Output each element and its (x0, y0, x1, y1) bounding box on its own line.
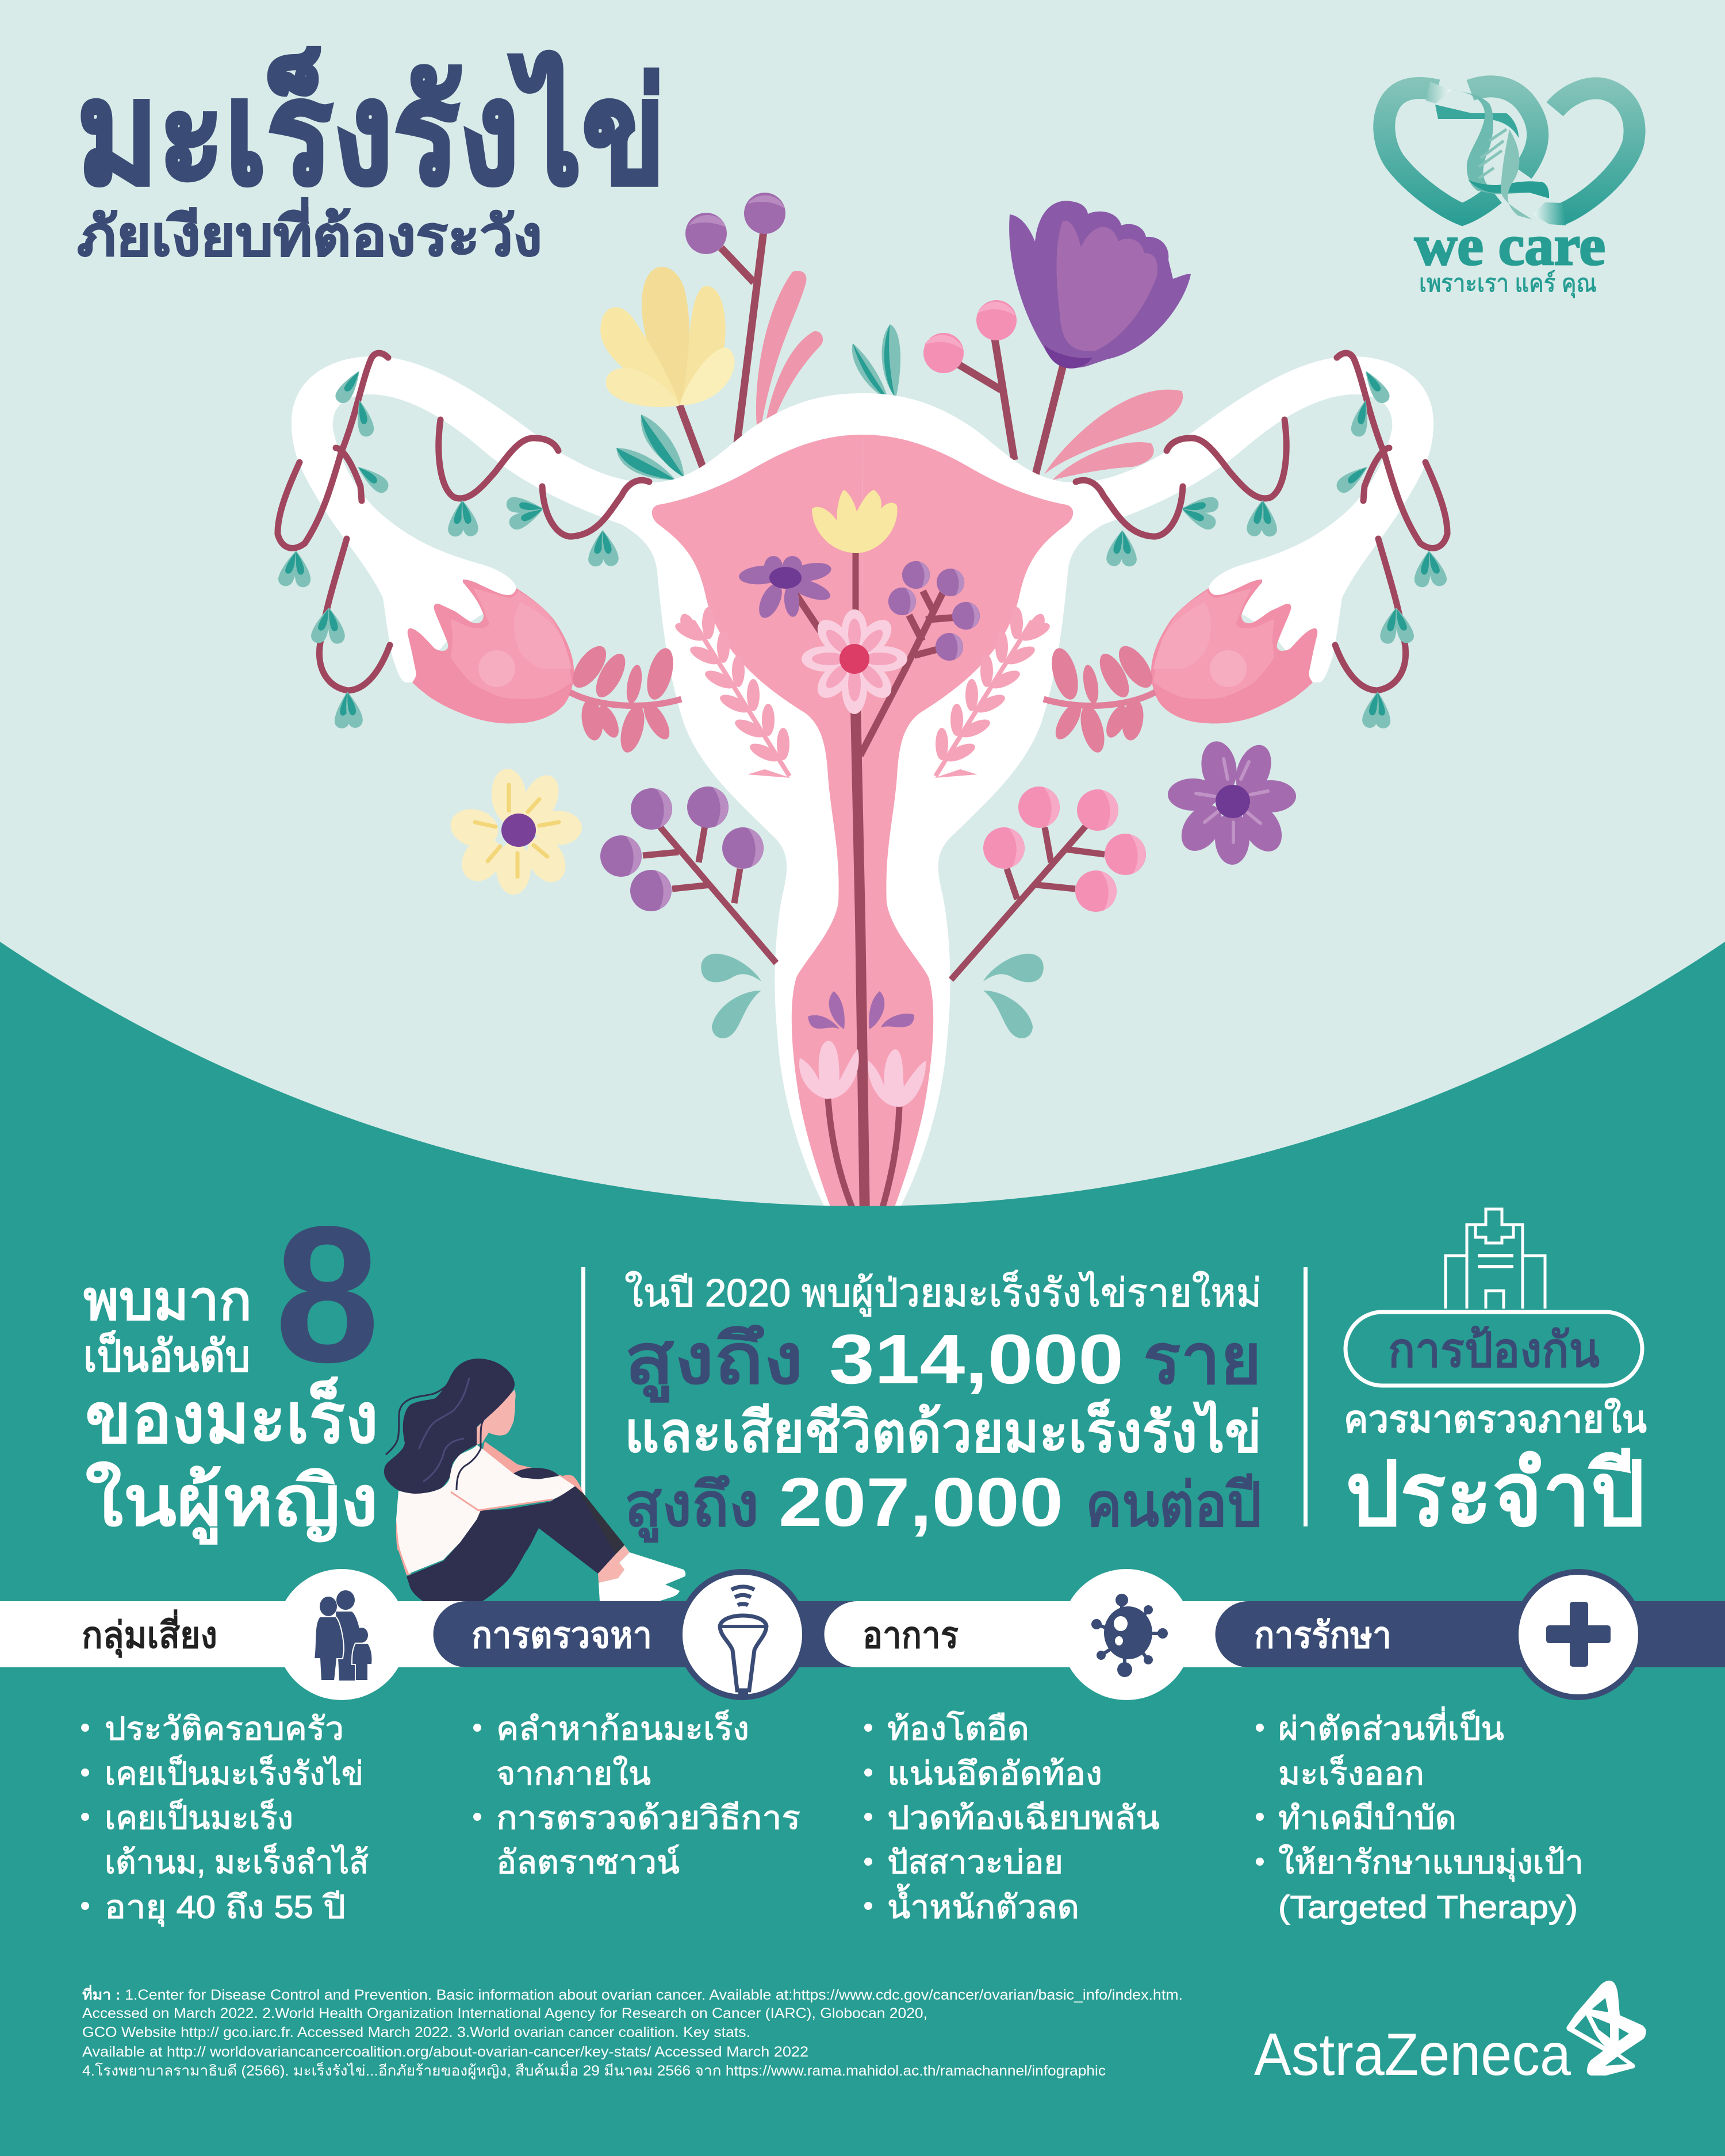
torso and arm (396, 1445, 575, 1574)
icon: pink berries (923, 300, 1017, 373)
list: symptoms (864, 1710, 1160, 1925)
branch: left purple berries (643, 826, 776, 963)
illustration: woman sitting (384, 1359, 685, 1601)
icon: small berries (888, 561, 980, 661)
illustration: flowers inside uterus (738, 490, 980, 1219)
illustration: side flowers (446, 738, 1296, 1038)
list: treatment: ทำเคมีบำบัด (1278, 1800, 1456, 1836)
icon: pale tulips (799, 1041, 926, 1107)
trousers (407, 1486, 624, 1601)
label: detection: การตรวจหา (471, 1614, 652, 1656)
logo tagline: เพราะเรา แคร์ คุณ (1419, 270, 1597, 298)
bullet markers (864, 1724, 872, 1910)
list: risk group (81, 1710, 369, 1927)
logo: we care (1384, 82, 1635, 298)
list: treatment: ให้ยารักษาแบบมุ่งเป้า (1278, 1844, 1584, 1882)
label: symptoms: อาการ (862, 1614, 959, 1656)
stat line 3: และเสียชีวิตด้วยมะเร็งรังไข่ (624, 1398, 1262, 1464)
list: symptoms: แน่นอึดอัดท้อง (887, 1755, 1102, 1791)
stat number deaths: 207,000 (779, 1464, 1063, 1541)
branch: right pink berries (951, 826, 1105, 980)
list: detection: จากภายใน (496, 1755, 651, 1791)
list items: คลำหาก้อนมะเร็ง (496, 1709, 749, 1747)
reference line 3: GCO Website http:// gco.iarc.fr. Accessed March 2022. 3.World ovarian cancer coalition. Key stats. (82, 2024, 750, 2040)
icon: purple flower (738, 556, 833, 622)
header band (0, 1569, 1725, 1700)
list: risk group: อายุ 40 ถึง 55 ปี (105, 1889, 346, 1927)
list: symptoms: ปัสสาวะบ่อย (887, 1844, 1063, 1880)
icon: ultrasound probe (720, 1587, 766, 1697)
label: treatment: การรักษา (1254, 1614, 1392, 1656)
symbol (1566, 1981, 1646, 2076)
leaves: centre teal (852, 324, 900, 400)
title: มะเร็งรังไข่ (77, 47, 666, 213)
prevention label: การป้องกัน (1388, 1323, 1600, 1377)
prevention emphasis: ประจำปี (1346, 1445, 1645, 1545)
icon: droplets (808, 991, 914, 1029)
reference line 4: Available at http:// worldovariancancercoalition.org/about-ovarian-cancer/key-stats/ Accessed March 2022 (82, 2044, 808, 2060)
icon: plus (1546, 1602, 1611, 1667)
icon: left heart (1384, 88, 1495, 214)
reference line 5: 4.โรงพยาบาลรามาธิบดี (2566). มะเร็งรังไข่...อีกภัยร้ายของผู้หญิง, สืบค้นเมื่อ 29 มีนาคม 2566 จาก https://www.rama.mahidol.ac.th/ramachannel/infographic (82, 2061, 1106, 2080)
icon: virus (1091, 1594, 1168, 1677)
label: risk group: กลุ่มเสี่ยง (82, 1609, 217, 1658)
knee (513, 1468, 561, 1481)
subtitle: ภัยเงียบที่ต้องระวัง (77, 197, 542, 267)
bullet markers (473, 1724, 481, 1821)
leaves: green under yellow flower (616, 415, 684, 480)
bullet markers (81, 1724, 89, 1910)
list: risk group: เคยเป็นมะเร็ง (105, 1798, 293, 1836)
logo: AstraZeneca (1254, 1981, 1646, 2088)
band segment: navy 1 (433, 1601, 862, 1667)
icon: cream flower (446, 768, 582, 895)
stem: central (856, 707, 865, 1219)
stat line 2 label: สูงถึง (624, 1320, 803, 1403)
stems: lower (828, 1099, 899, 1213)
circle 1 (276, 1569, 407, 1700)
shoe (599, 1552, 685, 1601)
rank line 4: ในผู้หญิง (85, 1461, 378, 1545)
list: detection: การตรวจด้วยวิธีการ (496, 1800, 800, 1836)
icon: right heart fade (1533, 202, 1566, 225)
stat: new cases and deaths (624, 1270, 1262, 1543)
list: treatment: (Targeted Therapy) (1278, 1889, 1578, 1925)
icon: yellow tulip (812, 490, 897, 553)
icon: yellow flower (600, 267, 735, 407)
stat line 1: ในปี 2020 พบผู้ป่วยมะเร็งรังไข่รายใหม่ (624, 1270, 1262, 1317)
reference line 1: ที่มา : 1.Center for Disease Control and Prevention. Basic information about ovarian cancer. Available at:https://www.cdc.gov/cancer/ovarian/basic_info/index.htm. (82, 1985, 1183, 2003)
hair (384, 1359, 515, 1494)
icon: purple tulip (1009, 201, 1191, 369)
icon: middle heart (1470, 86, 1538, 172)
circle 4 (1516, 1572, 1641, 1697)
logo wordmark: we care (1414, 213, 1605, 277)
circle 2 (680, 1572, 805, 1697)
list: detection (473, 1709, 800, 1880)
stem: purple tulip (1036, 365, 1063, 474)
rank number: 8 (275, 1186, 379, 1403)
divider (581, 1267, 585, 1526)
icon: family (314, 1590, 372, 1681)
prevention badge (1346, 1312, 1642, 1386)
stat: rank 8 (83, 1186, 379, 1545)
list items: ประวัติครอบครัว (105, 1710, 344, 1747)
wordmark: AstraZeneca (1254, 2021, 1571, 2088)
icon: dna ribbon (1435, 105, 1519, 138)
icon: teal drops left (701, 954, 761, 1038)
stat number new cases: 314,000 (829, 1320, 1124, 1398)
reference line 2: Accessed on March 2022. 2.World Health Organization International Agency for Research on Cancer (IARC), Globocan 2020, (82, 2005, 927, 2021)
teal lower panel (0, 942, 1725, 2156)
stat line 4 label: สูงถึง (624, 1471, 759, 1543)
band segment: white 1 (0, 1601, 471, 1667)
list: treatment (1256, 1706, 1584, 1925)
stat line 2 unit: ราย (1143, 1320, 1262, 1398)
divider (1304, 1267, 1308, 1526)
trousers shade (575, 1486, 624, 1554)
hair strands (386, 1378, 485, 1490)
leaves: pink right (1044, 390, 1183, 480)
face (477, 1390, 516, 1445)
illustration: flowers behind uterus (600, 193, 1191, 480)
bullet markers (1256, 1724, 1264, 1866)
list: symptoms: น้ำหนักตัวลด (887, 1884, 1079, 1925)
icon: purple berries (685, 193, 785, 254)
prevention text: ควรมาตรวจภายใน (1344, 1397, 1647, 1440)
underarm skin line (451, 1492, 553, 1510)
stem: purple berries (721, 231, 764, 443)
rank line 3: ของมะเร็ง (85, 1376, 378, 1457)
leaves: pink left (756, 271, 823, 428)
list items: ผ่าตัดส่วนที่เป็น (1278, 1706, 1504, 1747)
list: risk group: เต้านม, มะเร็งลำไส้ (105, 1843, 369, 1880)
list items: ท้องโตอืด (887, 1710, 1029, 1747)
icon: hospital (1446, 1209, 1545, 1309)
list: treatment: มะเร็งออก (1278, 1754, 1424, 1791)
icon: pink daisy (802, 609, 907, 714)
list: risk group: เคยเป็นมะเร็งรังไข่ (105, 1754, 363, 1791)
rank line 2: เป็นอันดับ (83, 1330, 250, 1381)
references (82, 1985, 1183, 2080)
stem: yellow flower (680, 405, 703, 467)
icon: right heart (1555, 88, 1635, 214)
list: detection: อัลตราซาวน์ (496, 1844, 680, 1880)
illustration: uterus and fallopian tubes, left half (276, 353, 864, 1219)
icon: right berries (983, 787, 1146, 912)
circle 3 (1061, 1569, 1192, 1700)
icon: left berries (600, 787, 764, 911)
stat line 4 unit: คนต่อปี (1086, 1471, 1262, 1539)
ankle (598, 1545, 630, 1583)
band segment: white 2 (824, 1601, 1254, 1667)
band segment: navy 2 (1215, 1601, 1725, 1667)
illustration: uterus and fallopian tubes, right half (861, 353, 1449, 1219)
arm skin (482, 1441, 583, 1493)
rank line 1: พบมาก (83, 1270, 252, 1332)
list: symptoms: ปวดท้องเฉียบพลัน (887, 1800, 1160, 1836)
branch stems (795, 591, 954, 755)
icon: left heart fade (1426, 82, 1451, 103)
stem: pink berries (959, 339, 1014, 460)
icon: purple flower right (1168, 738, 1296, 865)
icon: teal drops right (983, 954, 1044, 1038)
back skin (396, 1491, 411, 1575)
